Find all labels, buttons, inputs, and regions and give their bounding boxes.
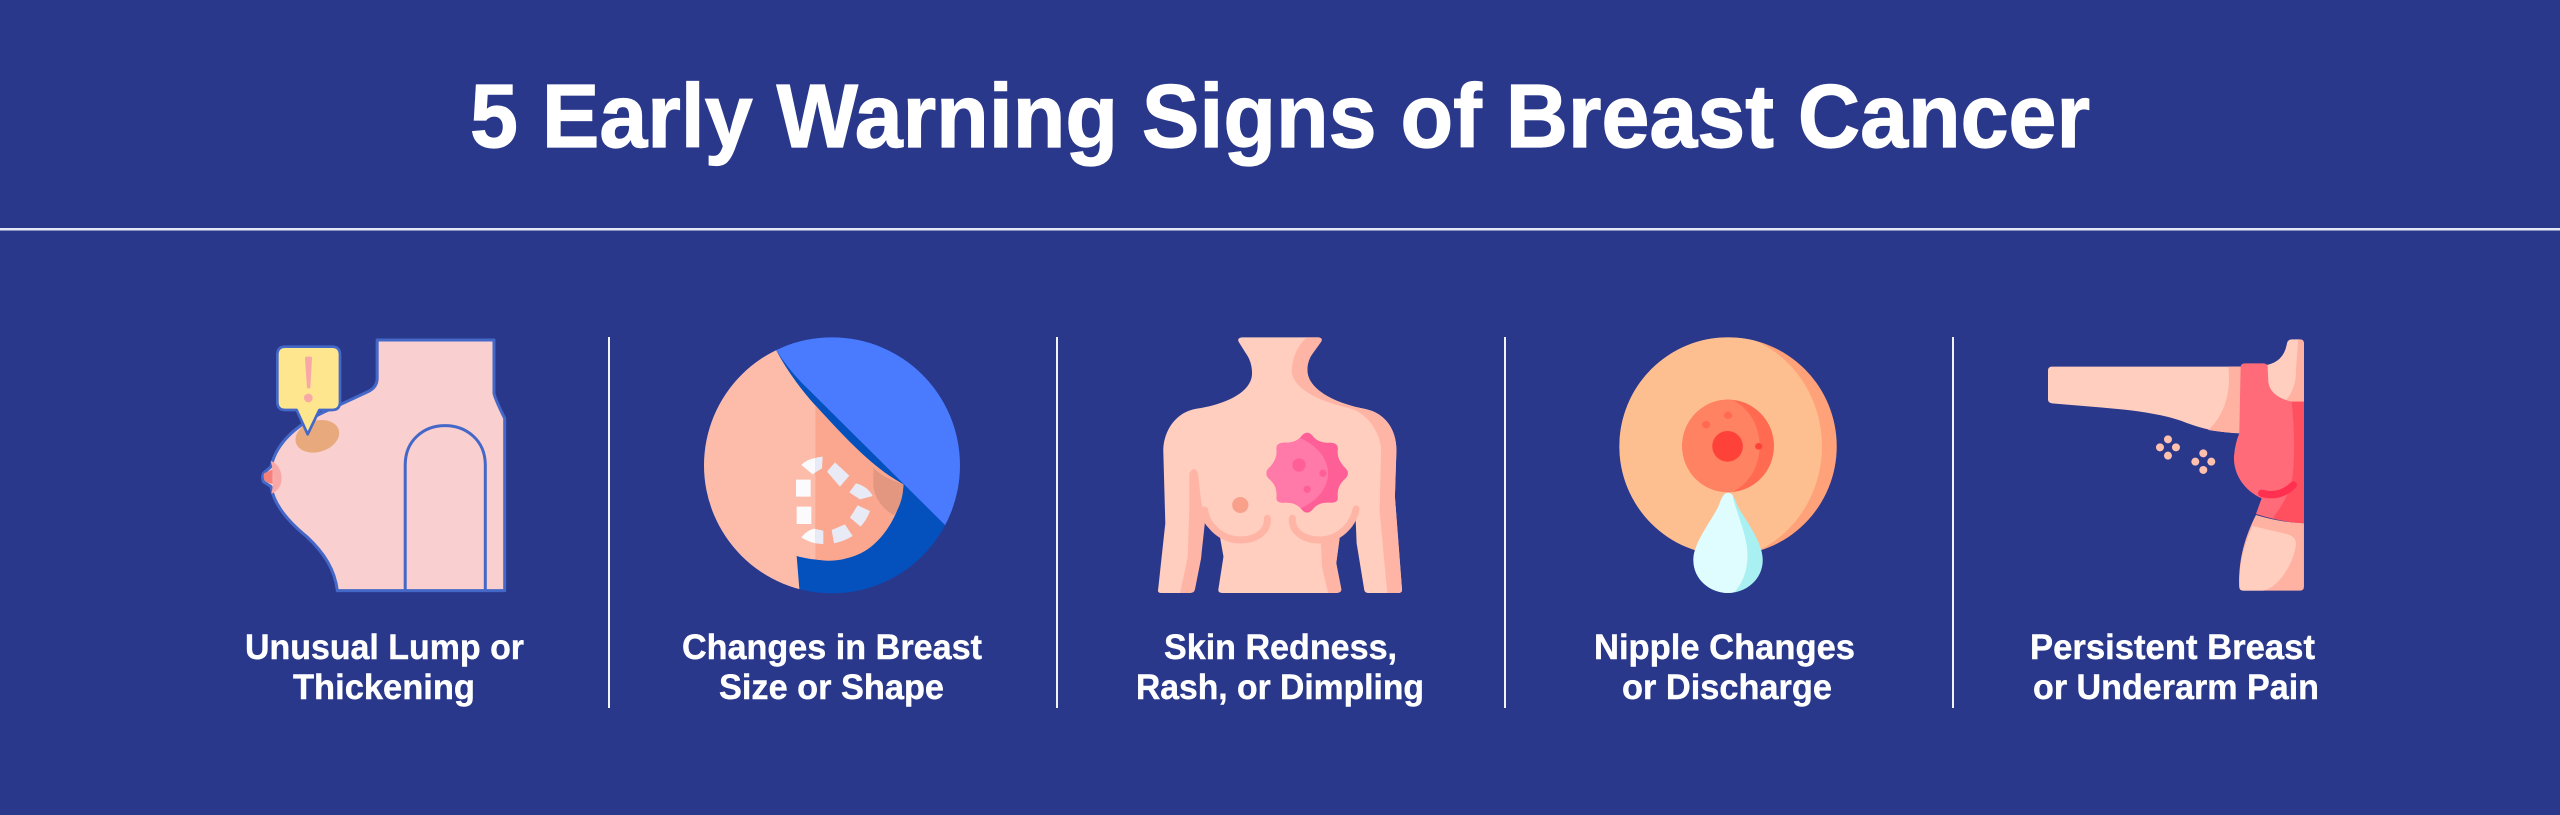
panel: nipple changes or discharge (1594, 331, 1855, 707)
label: Rash, or Dimpling (1136, 668, 1424, 707)
icon: raised arm with underarm pain (2048, 339, 2304, 591)
label: Size or Shape (719, 668, 944, 707)
label (245, 628, 524, 707)
icon: nipple with discharge droplet (1603, 331, 1837, 593)
title: 5 Early Warning Signs of Breast Cancer (470, 67, 2090, 167)
icon: torso with red rash (1158, 337, 1402, 593)
panel: skin redness, rash, or dimpling (1136, 337, 1424, 707)
label: or Underarm Pain (2033, 668, 2319, 707)
label: or Discharge (1622, 668, 1832, 707)
label: Nipple Changes (1594, 628, 1855, 667)
label (1136, 628, 1424, 707)
panel: changes in breast size or shape (682, 330, 982, 707)
panel: unusual lump or thickening (245, 340, 524, 707)
label: Skin Redness, (1164, 628, 1397, 667)
label: Unusual Lump or (245, 628, 524, 667)
label (682, 628, 982, 707)
icon: round breast view with dashed outline (704, 337, 960, 594)
label: Changes in Breast (682, 628, 982, 667)
panel: persistent breast or underarm pain (2030, 339, 2319, 707)
label (1594, 628, 1855, 707)
icon: breast profile with lump and alert bubble (263, 340, 505, 591)
label: Thickening (293, 668, 475, 707)
label (2030, 628, 2319, 707)
label: Persistent Breast (2030, 628, 2315, 667)
